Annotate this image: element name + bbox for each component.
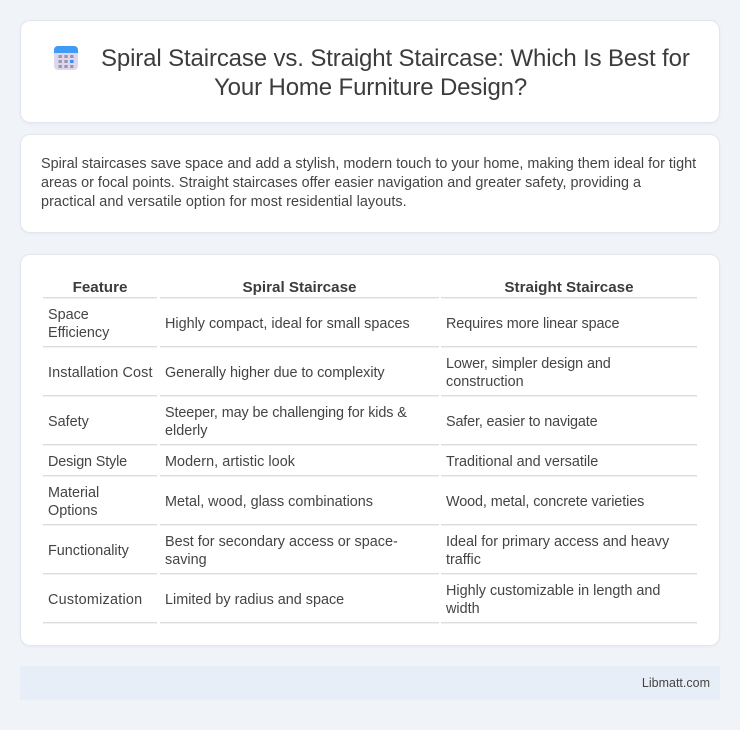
- intro paragraph: practical and versatile option for most residential layouts.: [41, 194, 407, 210]
- row: space efficiency: Highly compact, ideal for small spaces: [165, 316, 410, 332]
- row: functionality: saving: [165, 552, 207, 568]
- intro paragraph: areas or focal points. Straight staircases offer easier navigation and greater safety, providing a: [41, 175, 641, 191]
- row: material options: Wood, metal, concrete varieties: [446, 494, 644, 510]
- table header row: [43, 279, 697, 299]
- row: customization: width: [446, 601, 480, 617]
- panel: comparison table card: [20, 254, 720, 646]
- title: [101, 45, 690, 101]
- row: material options: Options: [48, 503, 98, 519]
- row: installation cost: Lower, simpler design and: [446, 356, 611, 372]
- row: customization: Highly customizable in length and: [446, 583, 660, 599]
- row: space efficiency: Efficiency: [48, 325, 109, 341]
- row: functionality: traffic: [446, 552, 481, 568]
- row: safety: Safer, easier to navigate: [446, 414, 597, 430]
- row: design style: Traditional and versatile: [446, 454, 598, 470]
- comparison table: [43, 279, 697, 624]
- row: material options: [43, 485, 697, 526]
- table header row: Feature: [73, 279, 127, 296]
- row: safety: elderly: [165, 423, 207, 439]
- row: installation cost: Installation Cost: [48, 365, 153, 381]
- row: functionality: Functionality: [48, 543, 129, 559]
- row: space efficiency: Requires more linear space: [446, 316, 619, 332]
- row: installation cost: construction: [446, 374, 524, 390]
- row: safety: Safety: [48, 414, 89, 430]
- row: functionality: Best for secondary access or space-: [165, 534, 398, 550]
- row: functionality: Ideal for primary access and heavy: [446, 534, 669, 550]
- row: functionality: [43, 534, 697, 575]
- panel: title card: [20, 20, 720, 123]
- row: installation cost: Generally higher due to complexity: [165, 365, 385, 381]
- row: material options: Metal, wood, glass combinations: [165, 494, 373, 510]
- footer brand text: Libmatt.com: [642, 676, 710, 690]
- footer bar: [20, 666, 720, 700]
- row: design style: Modern, artistic look: [165, 454, 295, 470]
- intro paragraph: Spiral staircases save space and add a stylish, modern touch to your home, making them ideal for tight: [41, 156, 696, 172]
- title: Your Home Furniture Design?: [214, 74, 527, 101]
- row: customization: Customization: [48, 592, 142, 608]
- icon: calendar grid: [54, 46, 78, 70]
- row: design style: Design Style: [48, 454, 127, 470]
- title: Spiral Staircase vs. Straight Staircase: Which Is Best for: [101, 45, 690, 72]
- row: safety: Steeper, may be challenging for kids &: [165, 405, 407, 421]
- intro paragraph: [41, 156, 696, 210]
- row: space efficiency: Space: [48, 307, 89, 323]
- table header row: Spiral Staircase: [242, 279, 356, 296]
- panel: intro text card: [20, 134, 720, 233]
- row: space efficiency: [43, 307, 697, 348]
- table header row: Straight Staircase: [504, 279, 634, 296]
- row: design style: [43, 454, 697, 477]
- row: customization: Limited by radius and space: [165, 592, 344, 608]
- row: safety: [43, 405, 697, 446]
- row: installation cost: [43, 356, 697, 397]
- row: material options: Material: [48, 485, 99, 501]
- row: customization: [43, 583, 697, 624]
